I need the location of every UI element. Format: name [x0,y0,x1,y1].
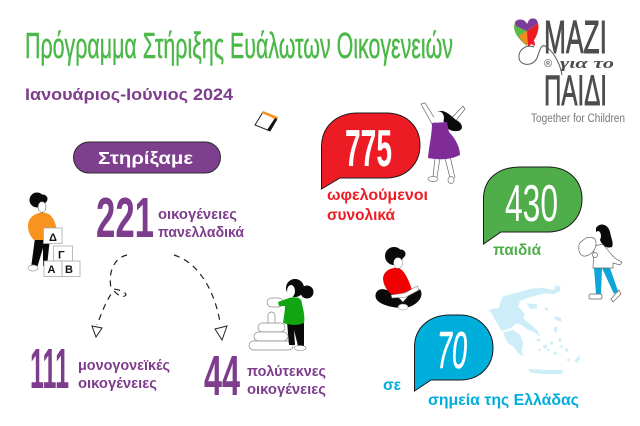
icon: boy reading, sitting cross-legged [375,247,421,310]
stat: 221 families: πανελλαδικά [158,225,244,241]
subtitle: date range: Ιανουάριος-Ιούνιος 2024 [25,85,234,104]
block alpha: Α [48,264,56,276]
label: in: σε [383,377,401,394]
label: beneficiaries total: ωφελούμενοι [327,187,428,204]
logo: Mazi gia to Paidi [514,11,625,125]
speech bubble: 775 beneficiaries [322,113,420,189]
speech bubble: 775 beneficiaries: 775 [345,120,392,178]
logo tagline: Together for Children [531,113,625,125]
logo balloon heart [514,18,538,47]
label: locations in Greece: σημεία της Ελλάδας [428,392,579,409]
heading pill: Stirixame [74,142,220,173]
speech bubble: 70 locations [414,315,493,391]
label: children: παιδιά [493,242,541,259]
speech bubble: 70 locations: 70 [437,322,467,380]
icon: girl holding teddy bear [579,225,622,302]
stat: 44 large families: οικογένειες [247,382,326,398]
stat: 44 large families [204,344,326,408]
block beta: Β [65,264,73,276]
icon: boy with alphabet blocks [28,192,80,276]
stat: 221 families: οικογένειες [158,207,237,223]
logo wordmark gia to: για το [560,56,614,72]
block delta: Δ [49,232,57,244]
stat: 221 families: 221 [96,186,154,250]
label: beneficiaries total [327,187,428,224]
block gamma: Γ [58,250,65,262]
stat: 111 single-parent families [30,337,170,401]
dashed arrow to single-parent families [92,255,127,337]
stat: 44 large families: πολύτεκνες [247,364,326,380]
icon: girl with stacking rings [249,279,314,350]
dashed arrow to large families [174,255,227,340]
stat: 44 large families: 44 [204,344,240,408]
stat: 111 single-parent families: οικογένειες [78,376,157,392]
heading pill: Stirixame: Στηρίξαμε [98,148,194,169]
icon: girl in purple dress with arms raised [421,103,465,184]
label: beneficiaries total: συνολικά [327,207,395,224]
icon: tumbling cube [255,111,278,131]
stat: 221 families [96,186,244,250]
logo registered mark: ® [544,58,552,70]
speech bubble: 430 children: 430 [505,175,558,233]
logo string [519,46,562,75]
speech bubble: 430 children [484,167,582,244]
stat: 111 single-parent families: μονογονεϊκές [78,358,170,374]
stat: 111 single-parent families: 111 [30,337,69,401]
map of Greece [488,285,580,374]
